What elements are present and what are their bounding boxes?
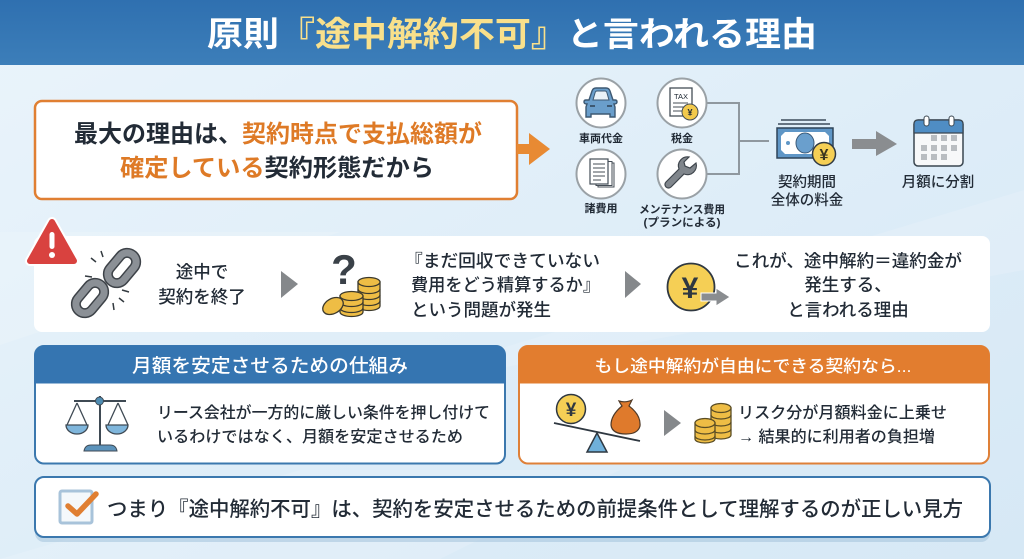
body text: → 結果的に利用者の負担増: [738, 428, 935, 446]
icon: documents: [576, 150, 626, 198]
icon: tax document: ¥: [687, 108, 693, 118]
arrow: to calendar: [852, 131, 897, 156]
flow text: 途中で契約を終了: [158, 262, 246, 307]
heading bar: [35, 346, 505, 383]
icon: tax document: TAX: [674, 92, 688, 101]
body text: いるわけではなく、月額を安定させるため: [157, 428, 463, 446]
panel: if free cancellation: [519, 346, 989, 464]
body text: リスク分が月額料金に上乗せ: [738, 403, 947, 422]
icon: car: [576, 78, 626, 128]
icon: checkbox: [60, 491, 96, 523]
panel: conclusion: [35, 477, 990, 542]
flow text: 結論: これが、途中解約＝違約金が: [734, 251, 962, 271]
flow text: 結論: [734, 251, 962, 320]
icon: question and coins: ?: [331, 246, 357, 293]
flow text: 途中で契約を終了: 契約を終了: [158, 287, 246, 307]
panel: consequence flow: [34, 236, 990, 332]
icon: yen coin with arrow: [668, 264, 730, 310]
body text: リース会社が一方的に厳しい条件を押し付けて: [157, 403, 490, 422]
arrow: reason to cost breakdown: [517, 133, 550, 165]
panel: main reason: [35, 101, 517, 199]
label: 月額に分割: 月額に分割: [902, 174, 974, 191]
connector lines: [707, 103, 769, 174]
label: 契約期間全体の料金: 全体の料金: [771, 192, 844, 209]
label: 契約期間全体の料金: 契約期間: [778, 174, 836, 191]
icon: calendar: [914, 116, 963, 166]
label: 車両代金: 車両代金: [579, 131, 623, 145]
label: 税金: 税金: [671, 131, 693, 145]
title banner: 原則『途中解約不可』 と言われる理由: [207, 16, 817, 54]
label: 契約期間全体の料金: [771, 174, 844, 209]
label: 諸費用: 諸費用: [584, 201, 618, 215]
flow text: 精算の問題: 『まだ回収できていない: [405, 251, 600, 271]
flow text: 結論: 発生する、: [804, 275, 892, 295]
icon: banknote with yen coin: ¥: [820, 147, 829, 164]
arrow: flow step 1: [281, 271, 298, 298]
flow text: 結論: と言われる理由: [787, 300, 909, 320]
flow text: 精算の問題: [405, 251, 600, 320]
arrow: flow step 2: [625, 271, 641, 298]
label: プランによる: (プランによる): [644, 216, 721, 229]
title banner: [0, 0, 1024, 65]
label: メンテナンス費用: メンテナンス費用: [639, 202, 725, 216]
icon: seesaw with yen and money bag: ¥: [566, 400, 577, 421]
heading bar: もし途中解約が自由にできる契約なら...: [594, 356, 912, 376]
icon: tax document: [658, 78, 706, 128]
icon: warning triangle: [30, 222, 74, 261]
heading bar: 月額を安定させるための仕組み: [132, 355, 408, 377]
heading bar: [519, 346, 989, 383]
main reason text line 2: 確定している契約形態だから: [120, 155, 434, 182]
main reason text line 1: 最大の理由は、契約時点で支払総額が: [74, 120, 482, 148]
icon: banknote with yen coin: [777, 120, 836, 166]
icon: broken chain: [72, 249, 140, 317]
body text: [738, 403, 947, 446]
flow text: 途中で契約を終了: 途中で: [176, 262, 228, 282]
flow text: 精算の問題: 費用をどう精算するか』: [411, 275, 600, 295]
icon: yen coin with arrow: ¥: [682, 272, 699, 305]
body text: [157, 403, 490, 446]
conclusion text: つまり『途中解約不可』は、契約を安定させるための前提条件として理解するのが正しい見方: [107, 498, 963, 521]
icon: wrench: [658, 150, 706, 198]
icon: question and coins: [320, 246, 380, 318]
flow text: 精算の問題: という問題が発生: [411, 300, 551, 320]
panel: stable monthly mechanism: [35, 346, 505, 464]
icon: coin stacks: [695, 404, 731, 443]
icon: seesaw with yen and money bag: [554, 394, 640, 452]
icon: scales: [66, 396, 128, 451]
arrow: [664, 410, 681, 436]
